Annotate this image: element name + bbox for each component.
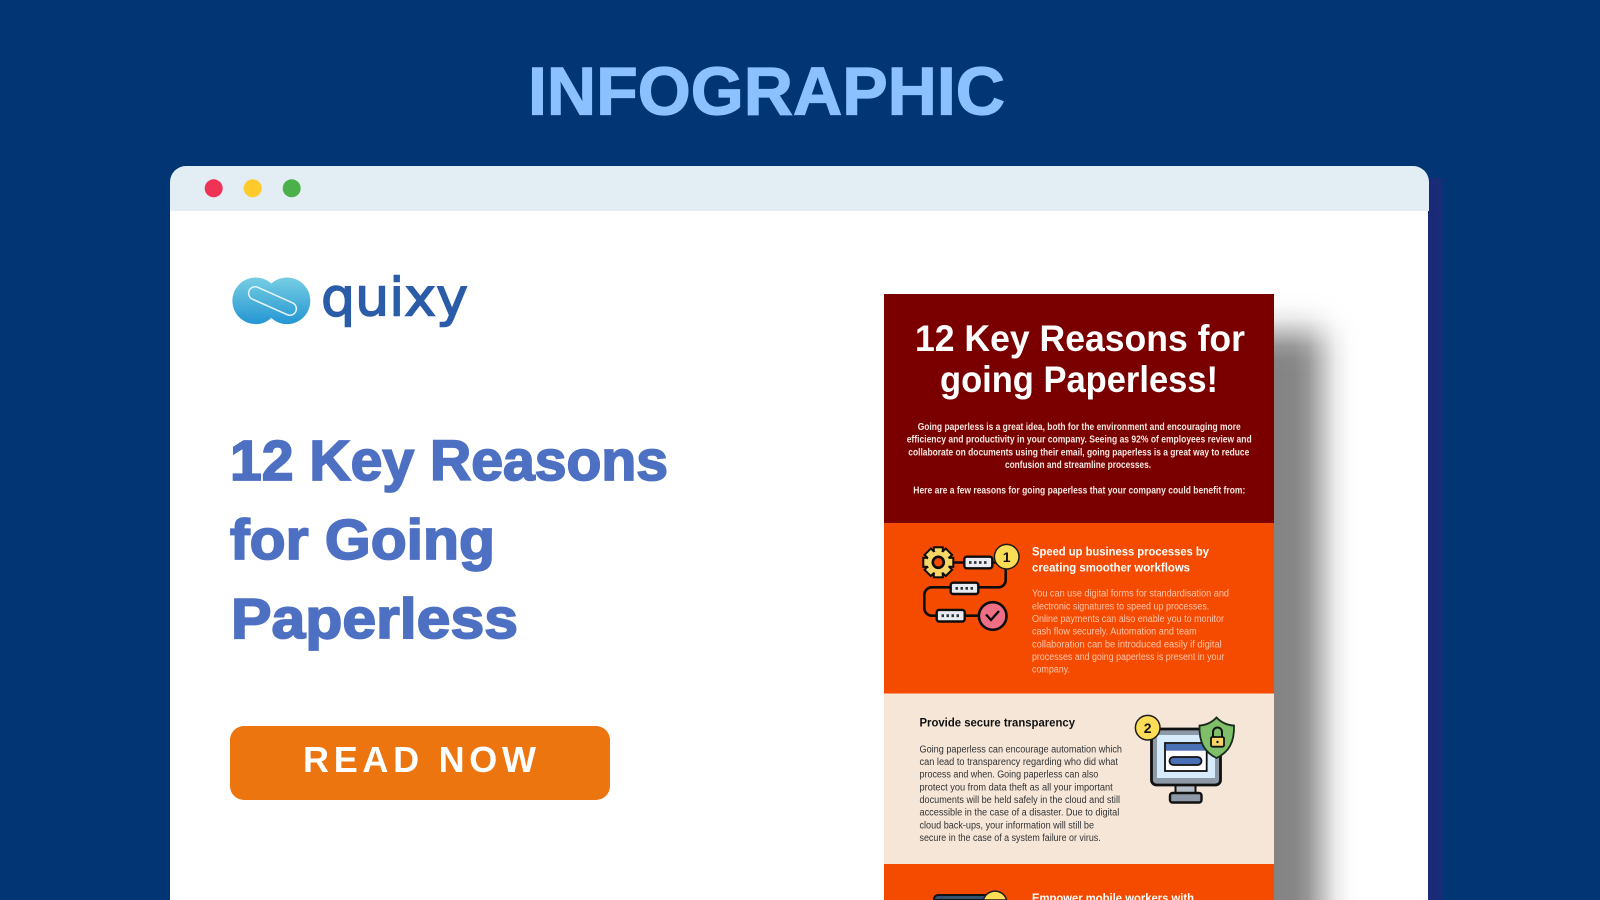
- reason 1 heading: Speed up business processes by: [1032, 547, 1210, 559]
- heading: for Going: [230, 508, 495, 572]
- window shadow strip: [1428, 178, 1445, 900]
- window control: yellow: [244, 179, 262, 197]
- reason 2 heading: Provide secure transparency: [920, 718, 1076, 730]
- panel: reason 3 (cropped): [884, 864, 1274, 900]
- icon: infinity logo mark: [232, 278, 310, 324]
- reason 1 heading: [1032, 547, 1210, 575]
- reason 1 text: [1032, 589, 1229, 676]
- browser chrome bar: [170, 166, 1429, 211]
- intro text: efficiency and productivity in your company. Seeing as 92% of employees review and: [907, 434, 1252, 446]
- logo: quixy: [232, 268, 468, 328]
- icon: secure monitor: [1135, 715, 1234, 802]
- logo wordmark: quixy: [321, 268, 468, 328]
- window body: [170, 200, 1428, 900]
- window control: green: [283, 179, 301, 197]
- heading: 12 Key Reasons: [230, 429, 668, 493]
- reason 1 text: You can use digital forms for standardisation and: [1032, 589, 1229, 600]
- intro text: Going paperless is a great idea, both for the environment and encouraging more: [918, 421, 1241, 433]
- reason 2 text: process and when. Going paperless can also: [920, 770, 1099, 781]
- reason 1 text: Online payments can also enable you to monitor: [1032, 614, 1225, 625]
- heading: Paperless: [231, 587, 518, 651]
- reason 2 text: documents will be held safely in the cloud and still: [920, 795, 1120, 806]
- icon: secure monitor: 2: [1144, 720, 1152, 736]
- panel: reason 2: [884, 694, 1274, 864]
- infographic title: going Paperless!: [940, 359, 1218, 400]
- reason 2 text: cloud back-ups, your information will still be: [920, 820, 1094, 831]
- intro text: [907, 421, 1252, 496]
- reason 2 text: accessible in the case of a disaster. Due to digital: [920, 808, 1119, 819]
- reason 2 text: protect you from data theft as all your important: [920, 782, 1113, 793]
- intro text: Here are a few reasons for going paperless that your company could benefit from:: [913, 484, 1245, 496]
- infographic drop shadow: [1274, 290, 1360, 900]
- reason 2 text: Going paperless can encourage automation which: [920, 744, 1122, 755]
- button: read now: READ NOW: [303, 739, 536, 780]
- intro text: collaborate on documents using their email, going paperless is a great way to reduce: [908, 446, 1249, 458]
- infographic title: [915, 318, 1245, 400]
- heading: [230, 429, 668, 651]
- panel: infographic preview: [884, 294, 1274, 900]
- reason 1 text: company.: [1032, 665, 1070, 676]
- reason 1 heading: creating smoother workflows: [1032, 563, 1190, 575]
- reason 1 text: processes and going paperless is present in your: [1032, 652, 1225, 663]
- icon: mobile (cropped): [934, 891, 1007, 900]
- infographic title: 12 Key Reasons for: [915, 318, 1245, 359]
- reason 1 text: collaboration can be introduced easily if digital: [1032, 639, 1222, 650]
- reason 1 text: cash flow securely. Automation and team: [1032, 627, 1197, 638]
- title: INFOGRAPHIC: [528, 54, 1005, 130]
- window control: red: [205, 179, 223, 197]
- reason 2 text: can lead to transparency regarding who did what: [920, 757, 1118, 768]
- reason 2 text: [920, 744, 1122, 844]
- reason 2 text: secure in the case of a system failure or virus.: [920, 833, 1101, 844]
- intro text: confusion and streamline processes.: [1005, 459, 1151, 471]
- button: read now: [230, 726, 610, 800]
- panel: reason 1: [884, 523, 1274, 694]
- icon: workflow: 1: [1003, 549, 1011, 565]
- reason 1 text: electronic signatures to speed up processes.: [1032, 601, 1209, 612]
- panel: red header: [884, 294, 1274, 523]
- icon: workflow: [923, 544, 1019, 630]
- panel: browser window: [170, 166, 1429, 900]
